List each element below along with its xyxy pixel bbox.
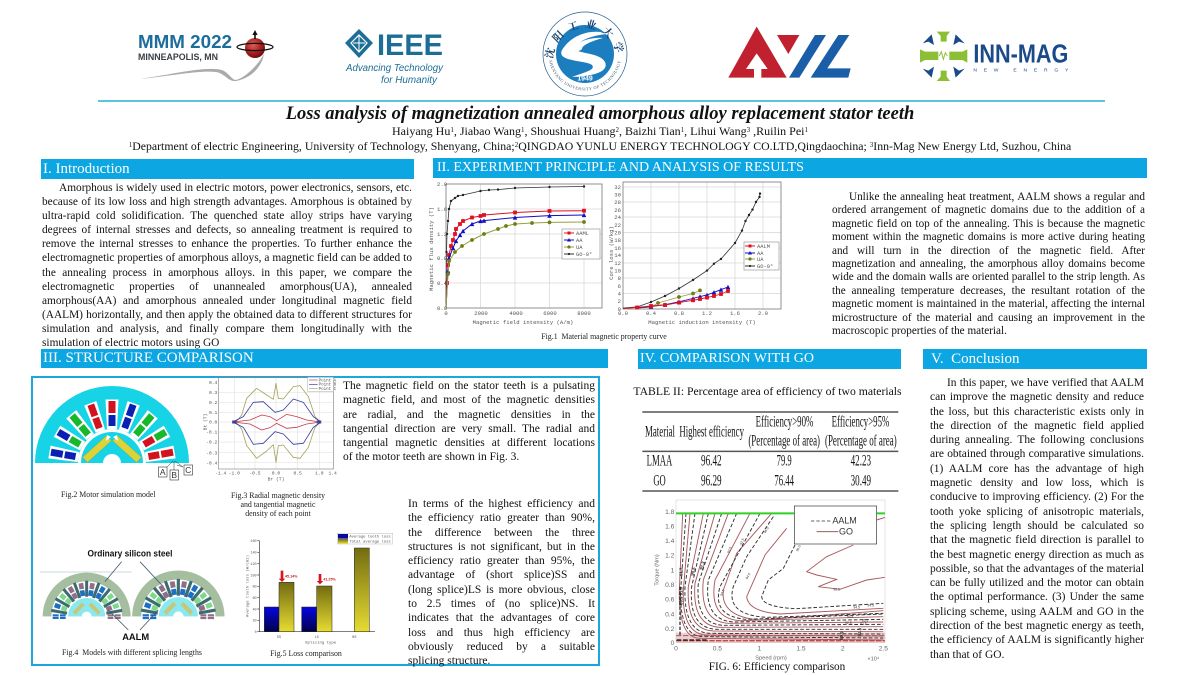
table: efficiency percentages: (Percentage of area) (825, 433, 897, 450)
text: experiment analysis: macroscopic properties of the material. (832, 325, 1007, 337)
logo: INN-MAG: INN-MAG (973, 39, 1068, 69)
chart: efficiency map contours: 0 (671, 640, 675, 647)
figure 3: radial and tangential magnetic density plot: 0.4 (209, 380, 218, 386)
legend: chart 1: GO-0° (576, 252, 592, 258)
text: conclusion: direction of the best magnetic energy as teeth, (930, 620, 1144, 632)
figure 5: loss comparison bar chart: Average tooth loss (W/cm2) (246, 555, 251, 617)
text: introduction: remove the internal stresses to enhance the properties. To further enhance the (42, 238, 412, 250)
chart: core loss vs induction intensity: 12 (614, 260, 621, 267)
figure 5: loss comparison bar chart: 0 (255, 631, 257, 635)
chart group: magnetic property curves (428, 181, 782, 326)
legend: chart 2: AALM (757, 244, 770, 250)
table: efficiency percentages: 96.29 (701, 472, 722, 489)
chart: magnetic flux density vs field intensity: 2.0 (437, 181, 448, 188)
chart: core loss vs induction intensity: 20 (614, 230, 622, 236)
chart: efficiency map contours: 1.5 (796, 645, 806, 652)
contour value labels (679, 526, 874, 640)
contour value labels: 90.5 (689, 566, 697, 576)
chart: magnetic flux density vs field intensity (428, 181, 602, 326)
figure 2: motor simulation model (35, 386, 192, 480)
contour value labels: 92.5 (739, 538, 745, 545)
text: efficiency ratio analysis: obviously reduced by a suitable (408, 641, 595, 653)
figure 3: radial and tangential magnetic density plot: 0.3 (209, 390, 218, 396)
chart: efficiency map contours: 1.8 (665, 509, 675, 516)
table: efficiency percentages: Efficiency>95% (832, 414, 889, 431)
table: efficiency percentages (642, 412, 898, 491)
text: conclusion: tooth yoke splicing of anisotropic materials, (930, 506, 1144, 518)
figure 3: radial and tangential magnetic density plot: Br (T) (268, 476, 285, 482)
logo: INN-MAG: NEW ENERGY (973, 67, 1069, 73)
legend: efficiency map: GO (839, 526, 853, 536)
chart: core loss vs induction intensity: 22 (614, 222, 621, 229)
text: stator teeth magnetic field: tangential magnetic densities at different locations (343, 437, 595, 449)
text: introduction: ultra-rapid cold solidification. The quenched state alloy strips have varying (42, 210, 412, 222)
text: efficiency ratio analysis: loss and thus high efficiency are (408, 627, 595, 639)
text: conclusion: splicing scheme, using AALM and GO in the (930, 606, 1144, 618)
text: conclusion: possible, so that the advantages of the material (930, 563, 1144, 575)
contour value labels: 96.5 (833, 587, 840, 591)
text: efficiency ratio analysis: splicing structure. (408, 655, 490, 667)
labels A B C: C (185, 465, 191, 475)
table: efficiency percentages: 96.42 (701, 452, 722, 469)
chart: core loss vs induction intensity: 16 (614, 245, 621, 252)
text: conclusion: than that of GO. (930, 649, 1004, 661)
legend: fig 3: Point C (319, 387, 337, 392)
chart: core loss vs induction intensity: 32 (614, 184, 621, 191)
chart: magnetic flux density vs field intensity: 8000 (577, 310, 591, 317)
text: introduction: amorphous(AA) and amorphous annealed under longitudinal magnetic field (42, 295, 412, 307)
logo: INN-MAG (920, 32, 1069, 81)
text: experiment analysis: magnetization and annealing, the amorphous alloy domains become (832, 258, 1145, 270)
text: conclusion: the optimal performance. (3) Under the same (930, 591, 1144, 603)
text: introduction: degrees of internal stresses and defects, so annealing treatment is required to (42, 224, 412, 236)
contour value labels: 92.5 (845, 621, 852, 625)
caption: Fig.3: density of each point (245, 509, 311, 518)
chart: core loss vs induction intensity: 1.2 (702, 310, 712, 317)
text: experiment analysis: and will turn in the direction of the magnetic field. After (832, 245, 1145, 257)
logo: university seal: SHENYANG UNIVERSITY OF TECHNOLOGY (549, 60, 621, 90)
text: conclusion: during annealing. The following conclusions (930, 434, 1144, 446)
dashed AALM contours (681, 513, 883, 638)
heading: I. Introduction (41, 159, 414, 179)
chart: magnetic flux density vs field intensity: 0 (444, 310, 448, 317)
legend: fig 3 (308, 377, 337, 392)
chart: core loss vs induction intensity: 28 (614, 199, 621, 206)
text: introduction: electromagnetic properties of unannealed amorphous(UA), annealed (42, 281, 412, 293)
arrow: 41.25% (317, 574, 336, 584)
figure 3: radial and tangential magnetic density plot: 1.4 (328, 471, 337, 477)
figure 3: radial and tangential magnetic density plot: Bt (T) (203, 413, 209, 430)
caption: Fig.2: Fig.2 Motor simulation model (61, 490, 156, 499)
text: introduction: Amorphous is widely used in electric motors, power electronics, sensors, etc. (59, 182, 412, 194)
chart: magnetic flux density vs field intensity: Magnetic flux density (T) (428, 207, 435, 291)
figure 5: loss comparison bar chart: 60 (252, 597, 257, 601)
text: stator teeth magnetic field: tangential direction are very small. The radial and (343, 423, 595, 435)
chart: magnetic flux density vs field intensity: 0.0 (437, 305, 448, 312)
figure 3: radial and tangential magnetic density plot: 0.0 (272, 471, 280, 477)
arrow: 41.25%: 41.25% (323, 577, 336, 581)
chart: core loss vs induction intensity: 26 (614, 207, 621, 214)
legend: chart 2: AA (757, 251, 764, 257)
legend: chart 2: GO-0° (757, 264, 773, 270)
caption: Fig.3: Fig.3 Radial magnetic density (231, 491, 325, 500)
chart: core loss vs induction intensity: 0.0 (618, 310, 629, 317)
chart: core loss vs induction intensity: 0 (618, 306, 622, 313)
chart: efficiency map contours: 1.6 (665, 523, 675, 530)
text: stator teeth magnetic field: are radial, and the magnetic densities in the (343, 409, 595, 421)
heading: II. Experiment principle: II. EXPERIMENT PRINCIPLE AND ANALYSIS OF RESULTS (437, 160, 804, 175)
solid GO contours (679, 513, 885, 640)
legend: fig 5: Total average loss (349, 540, 391, 545)
text: stator teeth magnetic field: of the motor teeth are shown in Fig. 3. (343, 451, 519, 463)
table caption: TABLE II: Percentage area of efficiency of two materials (633, 385, 902, 398)
contour value labels: 95.5 (862, 618, 868, 622)
text: introduction: simulation and analysis, and finally compare them longitudinally with the (42, 323, 412, 335)
logo: university seal: 1949 (577, 76, 593, 82)
chart: magnetic flux density vs field intensity: 1.2 (437, 231, 447, 238)
figure 5: loss comparison bar chart: SS (277, 636, 281, 640)
contour value labels: 95.5 (763, 526, 770, 534)
contour value labels: 94.5 (853, 606, 860, 610)
logo: MMM 2022: MINNEAPOLIS, MN (138, 52, 218, 63)
text: conclusion: the loss, but this characteristic exists only in (930, 406, 1144, 418)
text: conclusion: magnetic density and low loss, which is (930, 477, 1144, 489)
chart: efficiency map contours (654, 500, 888, 663)
figure 3: radial and tangential magnetic density plot: 0.0 (209, 420, 218, 426)
logo: AVIL (728, 27, 851, 78)
chart: core loss vs induction intensity (608, 182, 781, 326)
text: efficiency ratio analysis: (long splice)LS is more obvious, close (408, 584, 595, 596)
chart: efficiency map contours: 2 (841, 645, 845, 652)
arrow: 45.14% (279, 571, 298, 582)
caption: Fig.5: Fig.5 Loss comparison (270, 649, 342, 658)
figure 5: loss comparison bar chart: LS (315, 636, 319, 640)
chart: core loss vs induction intensity: Magnetic induction intensity (T) (648, 319, 756, 326)
text: efficiency ratio analysis: In terms of the highest efficiency and (408, 498, 595, 510)
text: efficiency ratio analysis: advantage of (short splice)SS and (408, 569, 595, 581)
heading: V. Conclusion: V. Conclusion (931, 351, 1019, 367)
figure 3: radial and tangential magnetic density plot: -0.2 (206, 440, 218, 446)
text: experiment analysis: ordered arrangement of magnetic domains due to the addition of a (832, 204, 1145, 216)
heading: II. Experiment principle (433, 158, 1147, 178)
chart: efficiency map contours: Speed (rpm) (755, 655, 787, 661)
chart: core loss vs induction intensity: 6 (618, 283, 621, 290)
text: conclusion: the direction of the magnetic field applied (930, 420, 1144, 432)
chart: core loss vs induction intensity: Core loss (W/kg) (608, 226, 615, 280)
contour value labels: 89.9 91.3 (679, 586, 684, 605)
figure 3: radial and tangential magnetic density plot: 1.0 (315, 471, 324, 477)
text: introduction: because of its low loss and high strength advantages. Amorphous is obtained by (42, 196, 412, 208)
figure 4: models with different splicing lengths: Ordinary silicon steel (87, 548, 172, 558)
figure 3: radial and tangential magnetic density plot: -0.4 (206, 460, 218, 466)
text: conclusion: the splicing length should be calculated so (930, 520, 1144, 532)
caption: Fig.4: Fig.4 Models with different splicing lengths (62, 648, 202, 657)
table: efficiency percentages: 30.49 (851, 472, 871, 489)
chart: core loss vs induction intensity: 2 (618, 298, 621, 305)
chart: efficiency map contours: 0.6 (665, 597, 675, 604)
chart: core loss vs induction intensity: 18 (614, 237, 621, 244)
chart: efficiency map contours: 1.2 (665, 553, 675, 560)
contour value labels: 92.5 (727, 546, 733, 554)
legend: chart 1 (562, 229, 600, 259)
text: introduction: electromagnetic properties of amorphous alloys, a magnetic field can be added to (42, 252, 412, 264)
chart: magnetic flux density vs field intensity: 0.8 (437, 255, 447, 262)
legend: efficiency map (794, 506, 877, 544)
chart: magnetic flux density vs field intensity: 4000 (509, 310, 523, 317)
logo: MMM 2022: MMM 2022 (138, 32, 232, 52)
legend: fig 5 (337, 533, 393, 545)
chart: efficiency map contours: 2.5 (879, 645, 888, 652)
chart: core loss vs induction intensity: 24 (614, 214, 622, 221)
contour value labels: 96.5 (795, 544, 802, 552)
header logos (138, 12, 1069, 96)
figure 3: radial and tangential magnetic density plot: 0.5 (293, 471, 302, 477)
table: efficiency percentages: 76.44 (774, 472, 794, 489)
contour value labels: 94.5 (745, 572, 752, 580)
text: stator teeth magnetic field (343, 380, 595, 463)
contour value labels: 93.5 (847, 615, 853, 619)
legend: chart 2: UA (757, 257, 764, 263)
logo: IEEE: for Humanity (381, 74, 438, 86)
text: stator teeth magnetic field: The magnetic field on the stator teeth is a pulsating (343, 380, 595, 392)
figure 4: models with different splicing lengths: AALM (122, 632, 149, 642)
text: experiment analysis (832, 191, 1145, 337)
figure 3: radial and tangential magnetic density plot: 0.2 (209, 400, 218, 406)
table: efficiency percentages: (Percentage of area) (748, 433, 820, 450)
chart: core loss vs induction intensity: 2.0 (758, 310, 769, 317)
table: efficiency percentages: LMAA (647, 452, 672, 469)
text: conclusion: (1) AALM core has the advantage of high (930, 463, 1144, 475)
text: experiment analysis: magnetic field on top of the annealing. This is because the magnetic (832, 218, 1145, 230)
caption: FIG. 6: FIG. 6: Efficiency comparison (709, 661, 845, 673)
legend: chart 2 (744, 242, 779, 270)
legend: fig 3: Point A (319, 378, 337, 383)
figure 3: radial and tangential magnetic density plot: -0.5 (249, 471, 261, 477)
text: efficiency ratio analysis: structures is not significant, but in the (408, 541, 595, 553)
logo: IEEE: Advancing Technology (345, 62, 444, 74)
text: experiment analysis: the annealing temperature decreases, the resultant rotation of the (832, 285, 1145, 297)
logo: university seal (542, 12, 628, 96)
text: efficiency ratio analysis: the difference between the three (408, 527, 595, 539)
contour value labels: 91.3 (699, 560, 706, 570)
chart: efficiency map contours: 0.4 (665, 611, 675, 618)
labels A B C: B (171, 470, 177, 480)
figure 5: loss comparison bar chart: 100 (250, 574, 257, 578)
chart: efficiency map contours: 0.5 (713, 645, 722, 652)
contour value labels: 91.3 (679, 567, 684, 576)
text: experiment analysis: magnetic moment is maintained in the material, affecting the internal (832, 298, 1145, 310)
chart: efficiency map contours: Torque (Nm) (654, 554, 660, 586)
heading: IV. Comparison with GO: IV. COMPARISON WITH GO (640, 351, 814, 366)
chart: core loss vs induction intensity: 4 (618, 290, 622, 298)
chart: efficiency map contours: 1 (671, 567, 675, 574)
contour value labels: 93.5 (720, 589, 726, 596)
arrow: 45.14%: 45.14% (285, 575, 298, 579)
text: stator teeth magnetic field: magnetic field, and most of the magnetic densities (343, 394, 595, 406)
table: efficiency percentages: GO (653, 472, 666, 489)
chart: core loss vs induction intensity: 30 (614, 191, 622, 198)
text: experiment analysis: microstructure of the material and causing an improvement in the (832, 312, 1145, 324)
table: efficiency percentages: 42.23 (851, 452, 871, 469)
contour value labels: 89.9 (839, 631, 844, 640)
caption: Fig.3 (231, 491, 325, 518)
chart: efficiency map contours: 1.4 (665, 538, 675, 545)
chart: efficiency map contours: ×10⁴ (867, 656, 880, 663)
table: efficiency percentages: Material (645, 424, 675, 441)
text: conclusion: the best magnetic energy direction as much as (930, 549, 1144, 561)
text: efficiency ratio analysis: to 2.5 times of (no splice)NS. It (408, 598, 595, 610)
figure 3: radial and tangential magnetic density plot: -0.3 (206, 450, 218, 456)
text: experiment analysis: Unlike the annealing heat treatment, AALM shows a regular and (849, 191, 1145, 203)
heading: IV. Comparison with GO (638, 349, 901, 369)
legend: chart 1: AA (576, 238, 583, 244)
title: Loss analysis of magnetization annealed amorphous alloy replacement stator teeth (286, 104, 914, 124)
affiliations: 1Department of electric Engineering, University of Technology, Shenyang, China;2QINGDAO YUNLU ENERGY TECHNOLOGY CO.LTD,Qingdaochina; 3Inn-Mag New Energy Ltd, Suzhou, China (129, 139, 1071, 153)
caption: Fig.3: and tangential magnetic (241, 500, 315, 509)
text: conclusion (930, 377, 1144, 661)
text: introduction: the annealing process in amorphous alloys. in this paper, we compare the (42, 267, 412, 279)
figure 5: loss comparison bar chart: 40 (252, 608, 257, 612)
authors: Haiyang Hu1, Jiabao Wang1, Shoushuai Huang2, Baizhi Tian1, Lihui Wang3 ,Ruilin Pei1 (392, 124, 808, 138)
green maximum torque line (676, 510, 885, 516)
chart: efficiency map contours: 1 (757, 645, 761, 652)
text: conclusion: conducive to improving efficiency. (2) For the (930, 491, 1144, 503)
text: conclusion: are obtained through comparative simulations. (930, 448, 1144, 460)
chart: core loss vs induction intensity: 1.6 (730, 310, 740, 317)
text: experiment analysis: wide and the domain walls are oriented parallel to the strip length. As (832, 271, 1145, 283)
panel: structure comparison (31, 376, 600, 666)
figure 3: radial and tangential magnetic density plot (203, 377, 337, 482)
figure 5: loss comparison bar chart: 120 (250, 563, 257, 567)
logo: university seal: 沈阳工业大学 (544, 19, 624, 58)
figure 5: loss comparison bar chart: 160 (250, 540, 257, 544)
low-torque dense contours (676, 587, 885, 641)
figure 3: radial and tangential magnetic density plot: -1.0 (229, 471, 240, 477)
chart: core loss vs induction intensity: 14 (614, 252, 622, 259)
heading: III. Structure comparison: III. STRUCTURE COMPARISON (43, 350, 254, 366)
figure 3: radial and tangential magnetic density plot: -0.1 (206, 430, 218, 436)
table: efficiency percentages: 79.9 (777, 452, 792, 469)
figure 5: loss comparison bar chart: Splicing type (305, 641, 337, 646)
table: efficiency percentages: Efficiency>90% (756, 414, 813, 431)
figure 5: loss comparison bar chart: 140 (250, 552, 257, 556)
figure 4: models with different splicing lengths (40, 548, 225, 642)
legend: chart 1: UA (576, 245, 583, 251)
chart: magnetic flux density vs field intensity: 0.4 (437, 280, 448, 287)
legend: chart 1: AAML (576, 231, 589, 237)
figure 5: loss comparison bar chart: NS (352, 636, 356, 640)
chart: core loss vs induction intensity: 0.8 (674, 310, 684, 317)
text: introduction: simulation of electric motors using GO (42, 337, 219, 349)
logo: MMM 2022 (138, 30, 273, 81)
chart: efficiency map contours: 0.2 (665, 626, 675, 633)
figure 3: radial and tangential magnetic density plot: -1.4 (215, 471, 226, 477)
text: conclusion: can improve the magnetic density and reduce (930, 391, 1144, 403)
contour value labels: 92.5 (860, 622, 867, 626)
text: conclusion: that the magnetic field direction is parallel to (930, 534, 1144, 546)
logo: IEEE (345, 29, 444, 86)
labels A B C (158, 461, 192, 480)
text: efficiency ratio analysis: efficiency ratio greater than 95%, the (408, 555, 595, 567)
logo: IEEE: IEEE (377, 29, 443, 62)
text: efficiency ratio analysis: indicates that the advantages of core (408, 612, 595, 624)
legend: fig 5: Average tooth loss (349, 535, 391, 540)
chart: core loss vs induction intensity: 10 (614, 268, 622, 275)
figure 5: loss comparison bar chart (246, 533, 393, 646)
text: introduction: (AALM) horizontally, and then apply the obtained data to different structures for (42, 309, 412, 321)
chart: magnetic flux density vs field intensity: 1.6 (437, 206, 447, 213)
chart: efficiency map contours: 0.8 (665, 582, 675, 589)
text: conclusion: In this paper, we have verified that AALM (947, 377, 1144, 389)
labels A B C: A (160, 467, 166, 477)
chart: magnetic flux density vs field intensity: 6000 (543, 310, 557, 317)
contour value labels: 91.3 (857, 627, 862, 637)
chart: core loss vs induction intensity: 0.4 (646, 310, 657, 317)
figure 5: loss comparison bar chart: 80 (252, 586, 257, 590)
table: efficiency percentages: Highest efficiency (679, 424, 744, 441)
text: experiment analysis: moment within the magnetic domains is more active during heating (832, 231, 1145, 243)
chart: core loss vs induction intensity: 8 (618, 275, 621, 282)
heading: V. Conclusion (923, 349, 1147, 369)
text: efficiency ratio analysis (408, 498, 595, 667)
caption: Fig.1: Fig.1 Material magnetic property curve (541, 332, 667, 341)
figure 3: radial and tangential magnetic density plot: 0.1 (209, 410, 218, 416)
legend: fig 3: Point B (319, 383, 337, 388)
text: efficiency ratio analysis: the efficiency ratio greater than 90%, (408, 512, 595, 524)
heading: I. Introduction: I. Introduction (43, 161, 130, 177)
figure 5: loss comparison bar chart: 20 (252, 620, 257, 624)
chart: magnetic flux density vs field intensity: Magnetic field intensity (A/m) (473, 319, 573, 326)
text: introduction (42, 182, 412, 349)
legend: efficiency map: AALM (832, 515, 857, 525)
chart: efficiency map contours: 0 (674, 645, 678, 652)
comparison table and efficiency map (642, 411, 898, 660)
chart: magnetic flux density vs field intensity: 2000 (474, 310, 488, 317)
text: conclusion: the efficiency of AALM is significantly higher (930, 634, 1144, 646)
heading: III. Structure comparison (41, 349, 608, 368)
text: conclusion: can be fully utilized and the motor can obtain (930, 577, 1144, 589)
contour value labels: 94.5 (867, 604, 874, 608)
